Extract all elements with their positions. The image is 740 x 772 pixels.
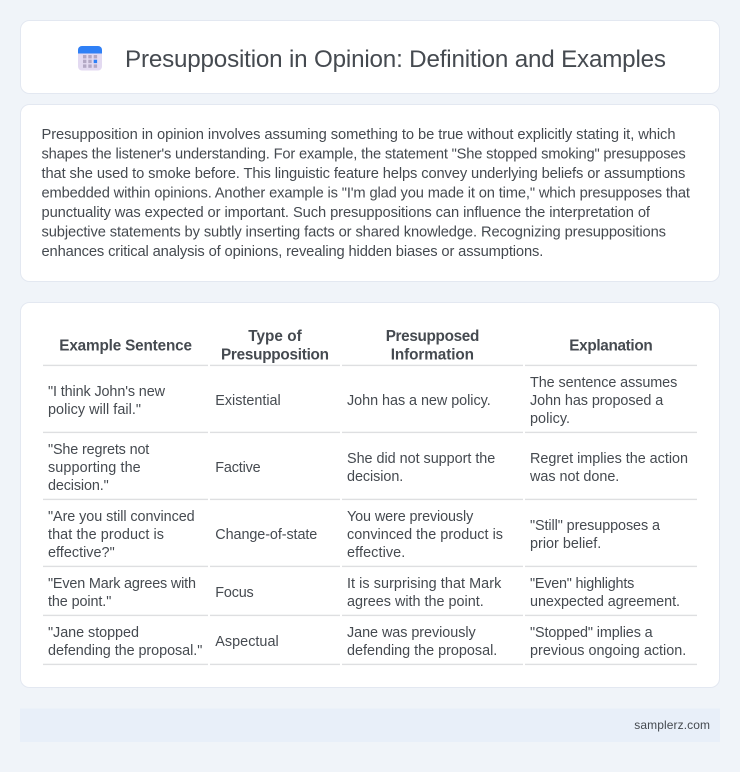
row: focus: "Even" highlights <box>530 576 634 592</box>
row: change-of-state: convinced the product is <box>347 527 503 543</box>
row: existential: The sentence assumes <box>530 375 677 391</box>
row: change-of-state: "Still" presupposes a <box>530 518 660 534</box>
footer bar <box>20 708 720 742</box>
row: change-of-state: You were previously <box>347 509 474 525</box>
row: aspectual: "Jane stopped <box>48 625 139 641</box>
table rules <box>43 365 697 665</box>
row: factive: She did not support the <box>347 451 495 467</box>
paragraph: punctuality was expected or important. Such presuppositions can influence the interpretation of <box>42 205 651 221</box>
table header row: Information <box>391 346 474 364</box>
row: existential: John has a new policy. <box>347 393 491 409</box>
row: factive: Factive <box>215 460 261 476</box>
table header row: Presupposition <box>221 346 329 364</box>
paragraph: subjective statements by subtly inserting facts or shared knowledge. Recognizing presuppositions <box>42 224 666 240</box>
row: factive: "She regrets not <box>48 442 149 458</box>
header panel <box>20 20 720 94</box>
row: existential <box>48 375 677 427</box>
paragraph: embedded within opinions. Another example is "I'm glad you made it on time," which presupposes that <box>42 186 690 202</box>
row: change-of-state: effective?" <box>48 545 115 561</box>
paragraph: that she used to smoke before. This linguistic feature helps convey underlying beliefs or assumptions <box>42 166 685 182</box>
table header row <box>59 328 653 364</box>
row: change-of-state: Change-of-state <box>215 527 317 543</box>
paragraph: enhances critical analysis of opinions, revealing hidden biases or assumptions. <box>42 244 543 260</box>
paragraph: shapes the listener's understanding. For example, the statement "She stopped smoking" presupposes <box>42 146 686 162</box>
row: focus: agrees with the point. <box>347 594 484 610</box>
row: aspectual: Aspectual <box>215 634 279 650</box>
row: change-of-state <box>48 509 660 561</box>
intro text panel <box>20 104 720 282</box>
table header row: Presupposed <box>386 328 479 345</box>
row: factive: Regret implies the action <box>530 451 688 467</box>
row: existential: John has proposed a <box>530 393 663 409</box>
table header row: Type of <box>248 328 303 345</box>
row: factive <box>48 442 688 494</box>
row: change-of-state: that the product is <box>48 527 164 543</box>
row: focus <box>48 576 680 610</box>
icon: calendar <box>78 46 102 70</box>
table header row: Explanation <box>569 338 653 354</box>
row: change-of-state: effective. <box>347 545 405 561</box>
table header row: Example Sentence <box>59 338 192 354</box>
table panel <box>20 302 720 688</box>
row: aspectual <box>48 625 686 659</box>
row: aspectual: defending the proposal. <box>347 643 497 659</box>
row: change-of-state: "Are you still convinced <box>48 509 195 525</box>
row: aspectual: defending the proposal." <box>48 643 202 659</box>
row: existential: "I think John's new <box>48 384 166 400</box>
row: change-of-state: prior belief. <box>530 536 601 552</box>
row: focus: unexpected agreement. <box>530 594 680 610</box>
row: aspectual: "Stopped" implies a <box>530 625 653 641</box>
row: existential: policy. <box>530 411 570 427</box>
title: Presupposition in Opinion: Definition and Examples <box>125 46 666 73</box>
row: aspectual: previous ongoing action. <box>530 643 686 659</box>
row: focus: "Even Mark agrees with <box>48 576 196 592</box>
row: factive: decision. <box>347 469 403 485</box>
row: existential: Existential <box>215 393 281 409</box>
row: factive: decision." <box>48 478 109 494</box>
row: factive: was not done. <box>529 469 619 485</box>
paragraph <box>42 127 690 260</box>
row: aspectual: Jane was previously <box>347 625 476 641</box>
row: focus: the point." <box>48 594 111 610</box>
row: focus: Focus <box>215 585 254 601</box>
row: existential: policy will fail." <box>48 402 141 418</box>
row: factive: supporting the <box>48 460 141 476</box>
row: focus: It is surprising that Mark <box>347 576 502 592</box>
footer source text: samplerz.com <box>634 718 710 732</box>
paragraph: Presupposition in opinion involves assuming something to be true without explicitly stating it, which <box>42 127 676 143</box>
